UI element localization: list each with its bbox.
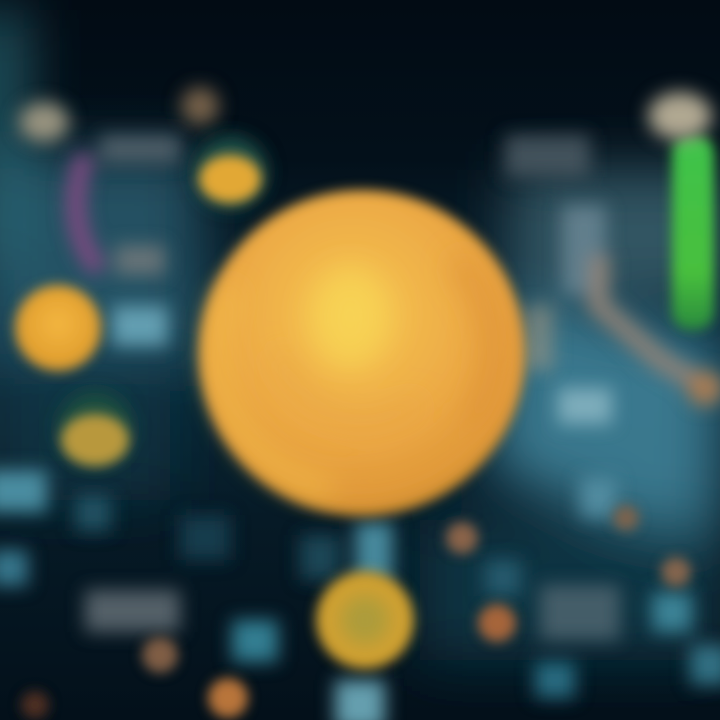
right city haze bbox=[420, 170, 720, 660]
green bar cap bbox=[648, 92, 712, 140]
small coin: lower left bbox=[59, 392, 131, 466]
coin inner highlights bbox=[217, 260, 493, 490]
small coin: left bbox=[15, 285, 101, 371]
left teal haze bbox=[0, 10, 200, 500]
upper-right chart shapes bbox=[505, 135, 720, 406]
upper-left ring and bars bbox=[76, 135, 180, 275]
lower scattered blocks bbox=[0, 306, 720, 720]
small coin: upper bbox=[195, 136, 267, 208]
large gold coin bbox=[199, 190, 525, 516]
small coin: bottom bbox=[316, 571, 414, 669]
green bar bbox=[672, 135, 714, 330]
upper-left beige dots bbox=[19, 87, 219, 142]
lower orange dots bbox=[21, 505, 691, 719]
